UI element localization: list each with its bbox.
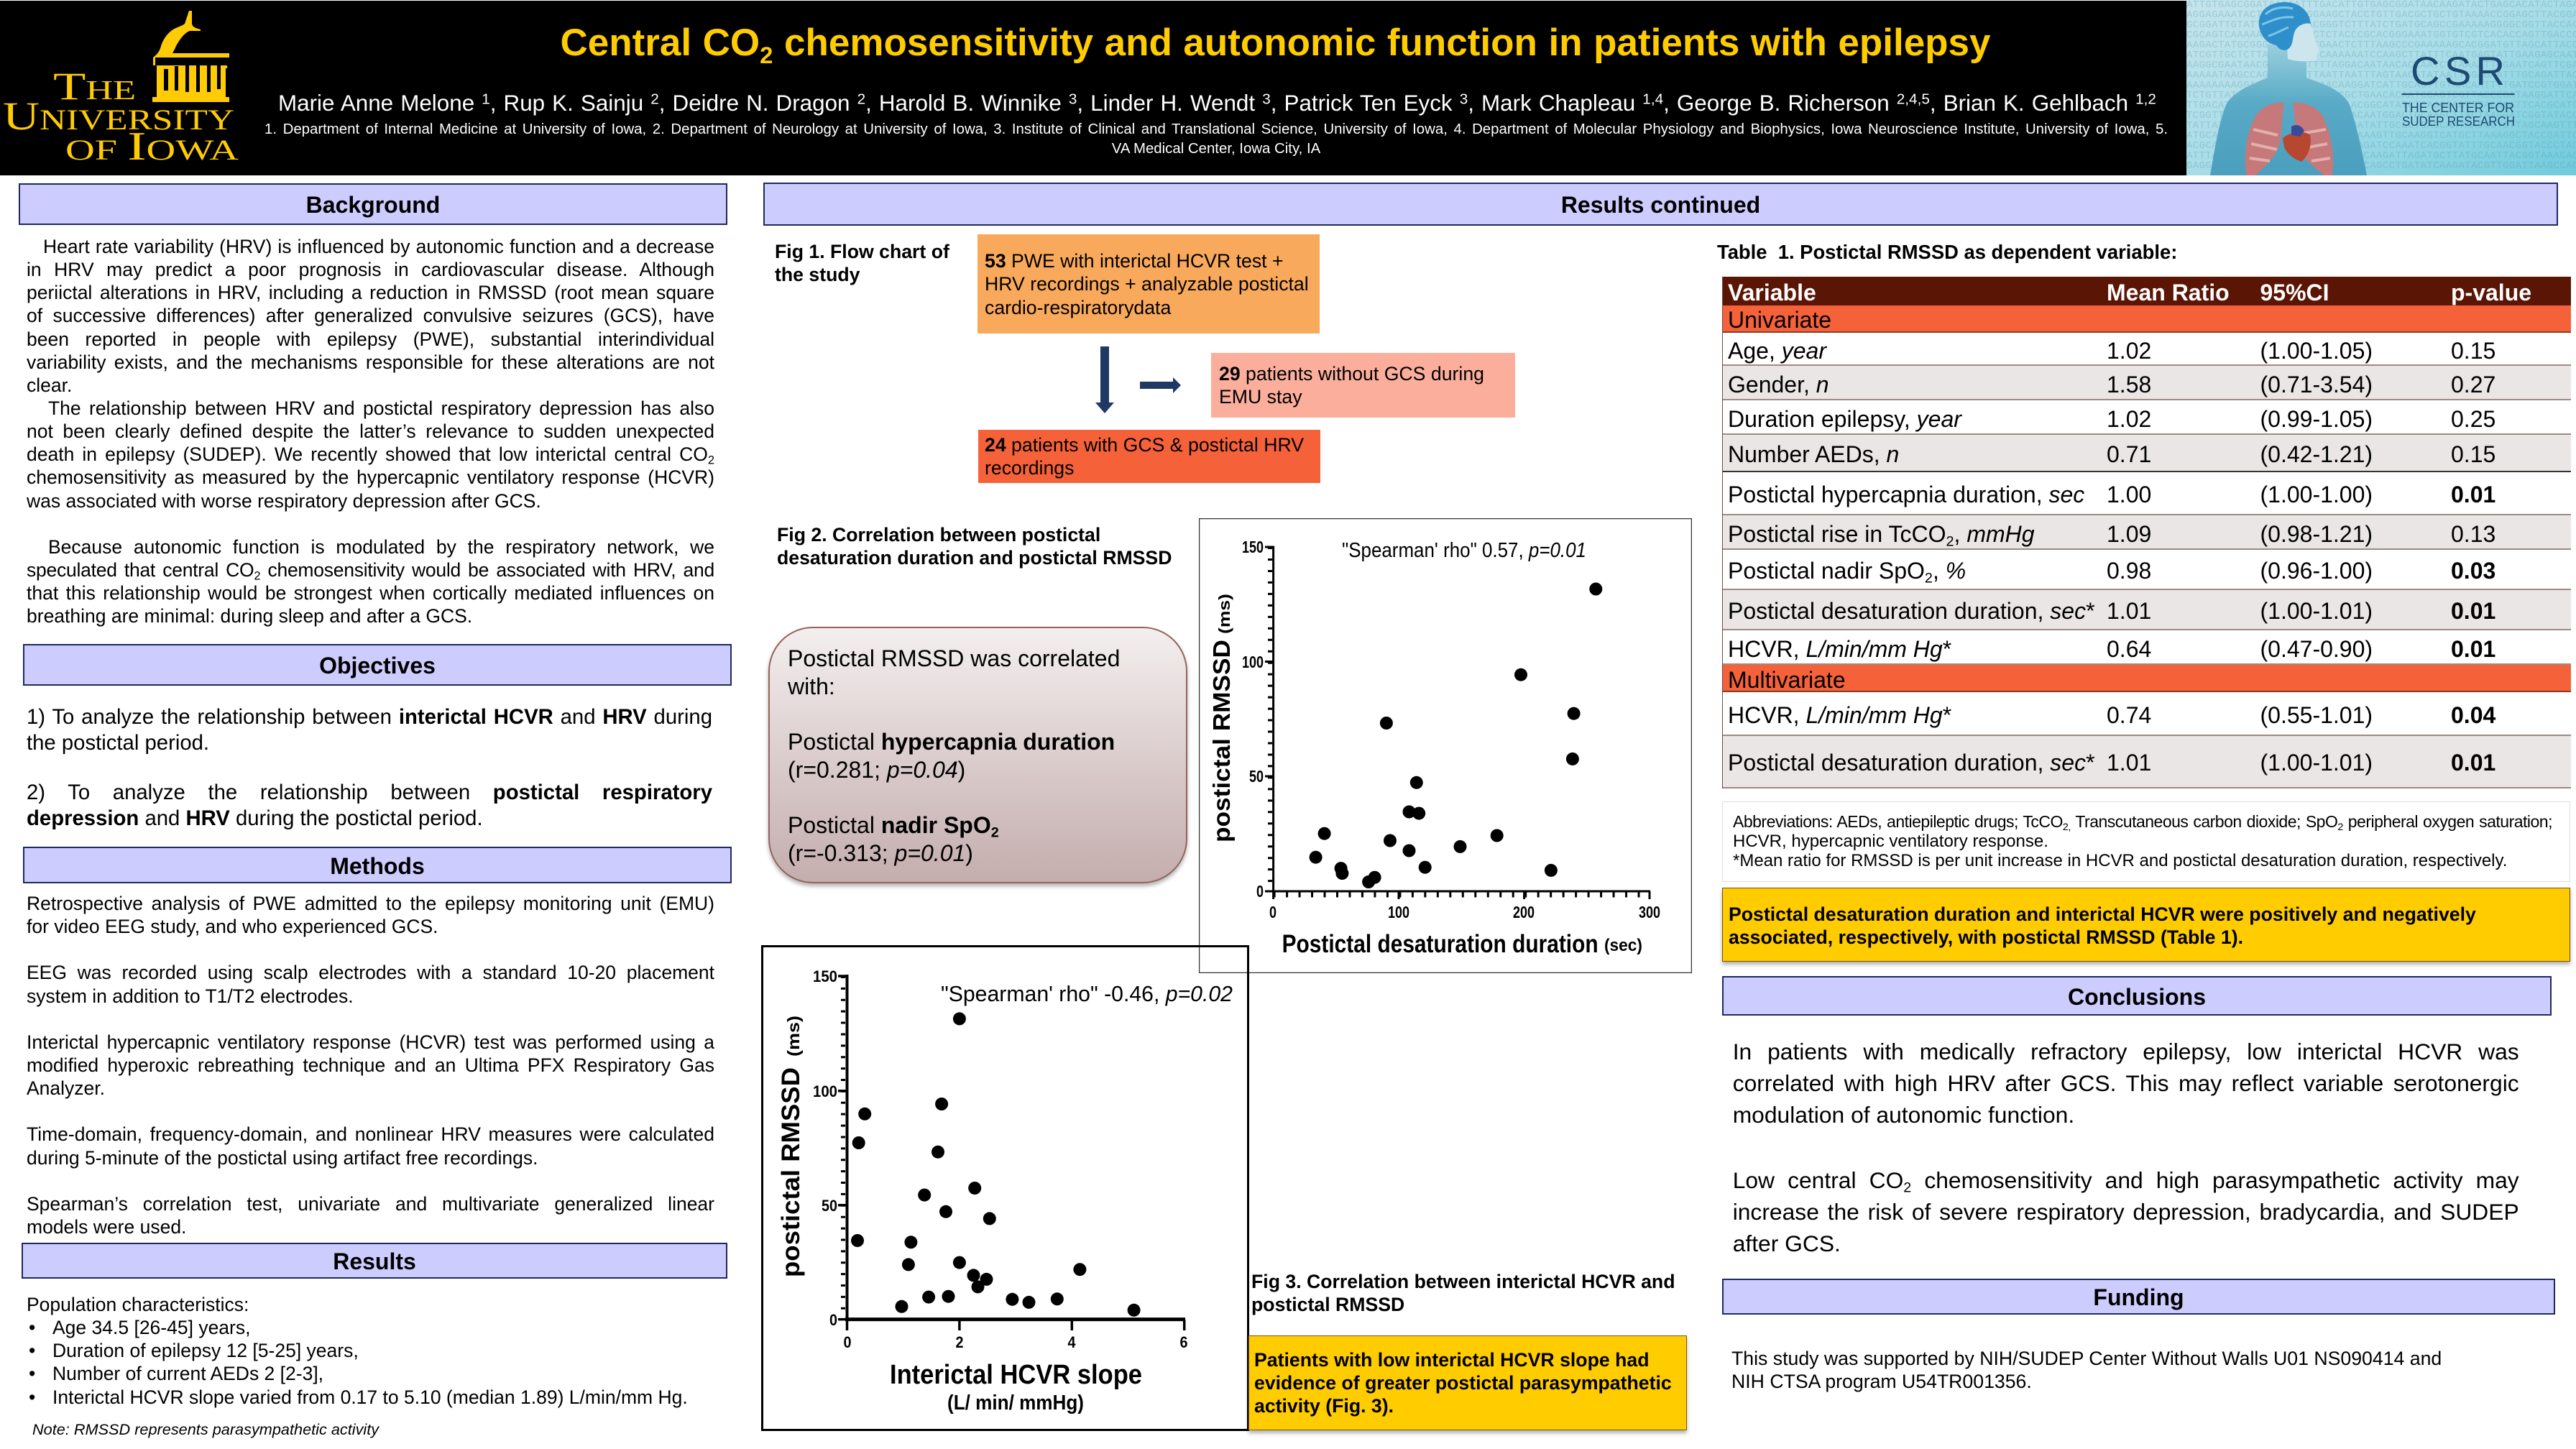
arrow: down [1095,346,1114,413]
text block: background [27,236,714,627]
text block: conclusions [1733,1039,2519,1256]
axis tick labels: 6 [1180,1333,1187,1351]
image: Center for SUDEP Research banner: AAGGCGAATAACGTTTGGCTTTTAGGACAATAACACCAATCTTAAAATTGGAATCAGTTCGA [2186,60,2576,71]
image: Center for SUDEP Research banner: ATTTATATGATTGTCATGAATTACTTATCAAGATTAGATGCTTATGCAATTACGGTAAACAG [2186,150,2576,162]
arrow: right [1140,377,1181,393]
callout: correlations: Postictal nadir SpO2 [788,812,999,841]
table: postictal RMSSD: 0.03 [2451,558,2496,584]
flow box: 24 patients: 24 patients with GCS & postictal HRV [985,434,1304,456]
logo: University of Iowa: OF IOWA [65,124,239,169]
image: Center for SUDEP Research banner [2186,0,2576,175]
text block: conclusions: modulation of autonomic function. [1733,1102,2074,1128]
table: postictal RMSSD: 0.15 [2451,338,2496,364]
figure 2 label [777,524,1172,569]
table title: Table 1. Postictal RMSSD as dependent variable: [1717,241,2177,263]
heading: Results [22,1243,727,1279]
data points [1310,582,1602,888]
text block: population characteristics [27,1294,688,1408]
callout: low HCVR finding: Patients with low interictal HCVR slope had [1254,1348,1649,1370]
table: postictal RMSSD: Postictal rise in TcCO2, mmHg [1728,521,2035,550]
heading: Funding: Funding [2093,1284,2184,1310]
lungs [2245,103,2284,175]
x axis title: Postictal desaturation duration [1282,930,1598,958]
logo: University of Iowa: U NIVERSITY [3,94,234,138]
table: postictal RMSSD: 95%CI [2260,280,2329,305]
axis tick labels: 50 [822,1197,837,1215]
callout: table finding: associated, respectively, with postictal RMSSD (Table 1). [1729,926,2243,948]
text block: population characteristics: • [29,1317,35,1338]
table: postictal RMSSD: 0.71 [2107,441,2151,467]
flow box: 53 PWE [978,234,1320,334]
figure 1 label: the study [775,264,860,285]
CSR logo text: SUDEP RESEARCH [2402,114,2515,129]
table: postictal RMSSD: 0.98 [2107,558,2151,584]
text block: population characteristics: Age 34.5 [26-45] years, [52,1317,250,1338]
x axis title [890,1360,1142,1414]
table: postictal RMSSD: p-value [2451,280,2531,305]
table: postictal RMSSD: 1.00 [2107,482,2151,507]
statistic annotation: "Spearman' rho" -0.46, p=0.02 [941,981,1233,1006]
axis tick labels: 2 [956,1333,963,1351]
figure 2 label: desaturation duration and postictal RMSSD [777,547,1172,569]
axis tick labels: 0 [1256,882,1264,901]
table: postictal RMSSD: 0.27 [2451,372,2496,397]
text block: conclusions: increase the risk of severe respiratory depression, bradycardia, and SUDEP [1733,1199,2519,1225]
text block: funding: NIH CTSA program U54TR001356. [1731,1371,2032,1392]
figure 3 label: Fig 3. Correlation between interictal HCVR and [1251,1271,1675,1292]
text block: population characteristics: Population characteristics: [27,1294,249,1315]
table: postictal RMSSD: Postictal desaturation duration, sec* [1728,750,2095,776]
table: postictal RMSSD: 0.04 [2451,702,2496,728]
text block: methods: Time-domain, frequency-domain, and nonlinear HRV measures were calculated [27,1123,714,1145]
text block: background: of successive differences) after generalized convulsive seizures (GCS), have [27,305,714,326]
heading: Funding [1722,1279,2555,1315]
text block: conclusions: Low central CO2 chemosensitivity and high parasympathetic activity may [1733,1167,2519,1196]
text block: population characteristics: Interictal HCVR slope varied from 0.17 to 5.10 (median 1.89) L/min/mm Hg. [52,1386,688,1408]
table: postictal RMSSD: (0.47-0.90) [2260,636,2373,662]
text block: methods: system in addition to T1/T2 electrodes. [27,985,354,1007]
table: postictal RMSSD: 0.74 [2107,702,2151,728]
callout: correlations: Postictal hypercapnia duration [788,729,1115,755]
callout: low HCVR finding: activity (Fig. 3). [1254,1395,1394,1417]
table: postictal RMSSD: (0.55-1.01) [2260,702,2373,728]
text block: background: clear. [27,374,72,396]
image: Center for SUDEP Research banner: GCGGATTGTATTTACGGGAACGGGTCTTTATCTGATGCAGCCGAAAAAGGGGCGGTTACCAG [2186,19,2576,31]
text block: methods: during 5-minute of the postictal using artifact free recordings. [27,1147,538,1169]
chart: interictal HCVR slope vs RMSSD [761,945,1249,1431]
CSR logo text: CSR [2411,48,2505,93]
abbreviations text box: *Mean ratio for RMSSD is per unit increase in HCVR and postictal desaturation duration, respectively. [1733,851,2507,870]
x axis title: Interictal HCVR slope [890,1360,1142,1390]
heading: Results continued: Results continued [1561,192,1760,218]
text block: conclusions: In patients with medically refractory epilepsy, low interictal HCVR was [1733,1039,2519,1064]
abbreviations text box: HCVR, hypercapnic ventilatory response. [1733,832,2048,851]
text block: methods: for video EEG study, and who experienced GCS. [27,916,438,937]
heading: Conclusions: Conclusions [2068,983,2206,1009]
table: postictal RMSSD: 0.01 [2451,598,2496,624]
table: postictal RMSSD: Age, year [1728,338,1826,364]
text block: background: breathing are minimal: during sleep and after a GCS. [27,605,472,627]
title: Central CO2 chemosensitivity and autonomic function in patients with epilepsy [561,22,1991,68]
callout: table finding [1722,888,2570,962]
table: postictal RMSSD: 1.58 [2107,372,2151,397]
image: Center for SUDEP Research banner: TCTGTTATAGCCGTCAGCAAAAGCCGCTGAACACAATCCAGTCGTTACCCGATAAGGATTCA [2186,90,2576,101]
affiliations: 1. Department of Internal Medicine at University of Iowa, 2. Department of Neurology at University of Iowa, 3. Institute of Clinical and Translational Science, University of Iowa, 4. Department of Molecular Physiology and Biophysics, Iowa Neuroscience Institute, University of Iowa, 5. [264,121,2168,137]
callout: low HCVR finding [1248,1335,1687,1430]
data points [851,1012,1141,1317]
table: postictal RMSSD: 0.13 [2451,521,2496,547]
axis tick labels [813,967,1187,1351]
axis tick labels: 100 [1388,903,1409,921]
axis tick labels: 150 [813,967,837,985]
table: postictal RMSSD: 0.01 [2451,750,2496,776]
axis tick labels: 300 [1639,903,1660,921]
flow box: 53 PWE: HRV recordings + analyzable postictal [985,273,1309,295]
table: postictal RMSSD: 1.02 [2107,338,2151,364]
image: Center for SUDEP Research banner: AAAAATAAGCCAGCTTTACTTAATTAATTTAGTAACGTATAATTGGAGAATTTGCAGATTAC [2186,70,2576,81]
axis tick labels: 0 [1269,903,1276,921]
heading: Objectives [23,644,732,686]
axis tick labels: 0 [829,1311,837,1329]
text block: population characteristics: • [29,1340,35,1361]
table: postictal RMSSD: Postictal desaturation duration, sec* [1728,598,2095,624]
image: Center for SUDEP Research banner: TCGGTTTTGGGCCAAATCCGTGACTTACAATGGACTGCAAGCTTACTAAGGATCGGTATACC [2186,110,2576,121]
table: postictal RMSSD: (1.00-1.05) [2260,338,2373,364]
table: postictal RMSSD: Variable [1728,280,1816,305]
text block: methods: Interictal hypercapnic ventilatory response (HCVR) test was performed using a [27,1031,714,1053]
table: postictal RMSSD: 1.01 [2107,750,2151,776]
y axis title: (ms) [784,1016,803,1057]
image: Center for SUDEP Research banner: AAAAAAAAGGAAATTTGTAAAAACAAGGATCATTGCACTTGTAACAATTTTGATCCGTGGAT [2186,80,2576,91]
text block: background: was associated with worse respiratory depression after GCS. [27,490,541,512]
table: postictal RMSSD: 1.01 [2107,598,2151,624]
table: postictal RMSSD: (0.42-1.21) [2260,441,2373,467]
table: postictal RMSSD: (0.98-1.21) [2260,521,2373,547]
x axis title: (sec) [1604,936,1642,955]
axis tick labels [1242,538,1660,921]
table: postictal RMSSD: (0.96-1.00) [2260,558,2373,584]
text block: background: in HRV may predict a poor prognosis in cardiovascular disease. Although [27,259,714,280]
heading: Background: Background [306,192,440,218]
callout: low HCVR finding: evidence of greater postictal parasympathetic [1254,1372,1672,1394]
image: Center for SUDEP Research banner: ATGCAAAAAAATCTGGACGGCGGAAATAAAGTTGCAAGGTCATGCTTAAAGGCTACCGATTC [2186,130,2576,142]
text block: background: chemosensitivity as measured by the hypercapnic ventilatory response (HCVR) [27,466,714,488]
table: postictal RMSSD: 1.02 [2107,406,2151,432]
logo: University of Iowa: T HE [53,65,136,108]
text block: background: that this relationship would be strongest when cortically mediated influences on [27,582,714,604]
flow box: 29 patients: EMU stay [1219,386,1302,408]
table: postictal RMSSD: (0.71-3.54) [2260,372,2373,397]
abbreviations text box: Abbreviations: AEDs, antiepileptic drugs; TcCO2, Transcutaneous carbon dioxide; SpO2 peripheral oxygen saturation; [1733,812,2552,833]
table: postictal RMSSD: HCVR, L/min/mm Hg* [1728,702,1951,728]
icon: body silhouette [2210,2,2367,175]
text block: population characteristics: • [29,1363,35,1384]
y axis title: postictal RMSSD [777,1067,805,1277]
text block: background: periictal alterations in HRV, including a reduction in RMSSD (root mean square [27,282,714,303]
note: Note: RMSSD represents parasympathetic activity [32,1420,379,1438]
text block: background: speculated that central CO2 chemosensitivity would be associated with HRV, and [27,559,714,583]
text block: background: not been clearly defined despite the latter’s relevance to sudden unexpected [27,420,714,442]
text block: background: Because autonomic function is modulated by the respiratory network, we [48,536,714,558]
text block: background: The relationship between HRV and postictal respiratory depression has also [48,397,714,419]
figure 1 label: Fig 1. Flow chart of [775,241,949,262]
axis tick labels: 0 [844,1333,851,1351]
heading: Objectives: Objectives [319,653,436,678]
axis tick labels: 200 [1513,903,1535,921]
flow box: 29 patients [1211,353,1515,418]
table: postictal RMSSD: 0.64 [2107,636,2151,662]
x axis title: (L/ min/ mmHg) [947,1392,1084,1414]
text block: methods: models were used. [27,1216,186,1238]
callout: correlations: with: [788,673,835,699]
image: Center for SUDEP Research banner: ATCGTTGCTCTTAATGATCCTCAAAAAATCCAAGCTTATTTCAATGAGTATTGAAGAGCAAT [2186,50,2576,61]
table: postictal RMSSD: 0.01 [2451,636,2496,662]
text block: methods: Spearman’s correlation test, univariate and multivariate generalized linear [27,1193,714,1215]
text block: conclusions: correlated with high HRV after GCS. This may reflect variable serotonergic [1733,1070,2519,1096]
table: postictal RMSSD: (1.00-1.01) [2260,598,2373,624]
figure 3 label: postictal RMSSD [1251,1294,1404,1315]
heading: Conclusions [1722,976,2552,1016]
image: Center for SUDEP Research banner: TATTATGAAACGGGTGCGAAAAAGTGGATATTGCGCTCAGCAATAACGGTCTTAGCAAGTTT [2186,120,2576,132]
heading: Results continued [763,183,2558,226]
heading: Background [19,183,727,225]
text block: methods: EEG was recorded using scalp electrodes with a standard 10-20 placement [27,962,714,983]
table: postictal RMSSD: Postictal hypercapnia duration, sec [1728,482,2084,507]
callout: correlations: Postictal RMSSD was correlated [788,645,1120,671]
figure 1 label [775,241,949,285]
text block: background: death in epilepsy (SUDEP). We recently showed that low interictal central CO2 [27,443,714,467]
callout: correlations: (r=0.281; p=0.04) [788,757,965,783]
text block: objectives: the postictal period. [27,731,209,755]
y axis title: (ms) [1215,594,1233,634]
text block: population characteristics: Number of current AEDs 2 [2-3], [52,1363,323,1384]
text block: methods: Analyzer. [27,1077,105,1099]
y axis title: postictal RMSSD [1208,640,1235,842]
table: postictal RMSSD: Number AEDs, n [1728,441,1899,467]
abbreviations text box [1722,801,2570,882]
text block: methods: modified hyperoxic rebreathing technique and an Ultima PFX Respiratory Gas [27,1054,714,1076]
image: Center for SUDEP Research banner: ACGCACAGGCAAGGCGCTTCCGGGAACAGATCCAAATCACGGTATTTGCAACGGTACCCTAG [2186,140,2576,152]
text block: background: been reported in people with epilepsy (PWE), substantial interindividual [27,328,714,350]
table: postictal RMSSD: Duration epilepsy, year [1728,406,1961,432]
text block: funding [1731,1348,2442,1392]
callout: table finding: Postictal desaturation duration and interictal HCVR were positively and negatively [1729,903,2476,925]
CSR logo text: THE CENTER FOR [2402,101,2514,115]
authors: Marie Anne Melone 1, Rup K. Sainju 2, Deidre N. Dragon 2, Harold B. Winnike 3, Linder H. Wendt 3, Patrick Ten Eyck 3, Mark Chapleau 1,4, George B. Richerson 2,4,5, Brian K. Gehlbach 1,2 [278,91,2156,116]
text block: background: Heart rate variability (HRV) is influenced by autonomic function and a decrease [43,236,714,257]
text block: objectives: depression and HRV during the postictal period. [27,806,483,830]
table: postictal RMSSD: (0.99-1.05) [2260,406,2373,432]
header band [0,1,2576,175]
table: postictal RMSSD: (1.00-1.01) [2260,750,2373,776]
text block: population characteristics: Duration of epilepsy 12 [5-25] years, [52,1340,359,1361]
table: postictal RMSSD: 0.25 [2451,406,2496,432]
axis tick labels: 150 [1242,538,1264,556]
heading: Methods [23,847,732,883]
chart: postictal desaturation vs RMSSD [1199,518,1692,973]
text block: funding: This study was supported by NIH/SUDEP Center Without Walls U01 NS090414 and [1731,1348,2442,1369]
table: postictal RMSSD: Univariate [1728,307,1831,333]
flow box: 24 patients: recordings [985,457,1074,479]
table: postictal RMSSD [1722,277,2571,788]
image: Center for SUDEP Research banner: AGGAGAAATACTAGATGACGGAAGCTACCTGTTGACGCTGCTGTAAAACCGGAGCTTACGGA [2186,9,2576,21]
image: Center for SUDEP Research banner: AAGACTATGCGGGCTGGCATCGAACTCTTTAAGCCCGAAAAAGCACGGATGTTAGCATTACG [2186,40,2576,51]
image: Center for SUDEP Research banner: GAGGCCTTCTGTACAGCACCCAAGTCAACAGCCTGATATCAAGATACGTTGGATTAAGCCAC [2186,160,2576,172]
heading: Methods: Methods [330,852,425,878]
flow box: 24 patients [978,430,1320,483]
table: postictal RMSSD: (1.00-1.00) [2260,482,2373,507]
text block: methods [27,893,714,1238]
flow box: 53 PWE: cardio-respiratorydata [985,297,1171,318]
logo: University of Iowa [3,11,239,169]
table: postictal RMSSD: HCVR, L/min/mm Hg* [1728,636,1951,662]
affiliations [264,121,2168,157]
table: postictal RMSSD: 1.09 [2107,521,2151,547]
text block: population characteristics: • [29,1386,35,1408]
table: postictal RMSSD: Multivariate [1728,667,1846,693]
table: postictal RMSSD: 0.15 [2451,441,2496,467]
table: postictal RMSSD: Mean Ratio [2107,280,2230,305]
text block: objectives [27,705,712,830]
text block: objectives: 2) To analyze the relationship between postictal respiratory [27,781,712,804]
axis tick labels: 100 [813,1082,837,1100]
figure 2 label: Fig 2. Correlation between postictal [777,524,1100,546]
flow box: 29 patients: 29 patients without GCS during [1219,363,1484,385]
image: Center for SUDEP Research banner: TTGACATTTGCGGCATCGATTACGCAACGGCATATCTCAGGGACTTTACGGATTCACGCATG [2186,100,2576,111]
callout: correlations [768,627,1187,883]
image: Center for SUDEP Research banner: CGCAGTCAAAAAGTGGTGCGCTCTACCCGCACGGGAAATGGTGTCGTCACACCAGTTGACCG [2186,29,2576,41]
figure 3 label [1251,1271,1675,1315]
CSR logo text [2402,48,2515,129]
flow box: 53 PWE: 53 PWE with interictal HCVR test + [985,250,1284,272]
text block: objectives: 1) To analyze the relationship between interictal HCVR and HRV during [27,705,712,729]
text block: background: variability exists, and the mechanisms responsible for these alterations are not [27,351,714,373]
statistic annotation: "Spearman' rho" 0.57, p=0.01 [1342,539,1586,562]
affiliations: VA Medical Center, Iowa City, IA [1112,141,1320,157]
axis tick labels: 4 [1068,1333,1076,1351]
table: postictal RMSSD: Postictal nadir SpO2, % [1728,558,1966,586]
axis tick labels: 50 [1249,767,1264,786]
callout: correlations: (r=-0.313; p=0.01) [788,840,973,866]
table: postictal RMSSD: 0.01 [2451,482,2496,507]
axis tick labels: 100 [1242,653,1264,671]
table: postictal RMSSD: Gender, n [1728,372,1829,397]
text block: conclusions: after GCS. [1733,1230,1841,1256]
heading: Results: Results [333,1248,416,1274]
text block: methods: Retrospective analysis of PWE admitted to the epilepsy monitoring unit (EMU) [27,893,714,914]
